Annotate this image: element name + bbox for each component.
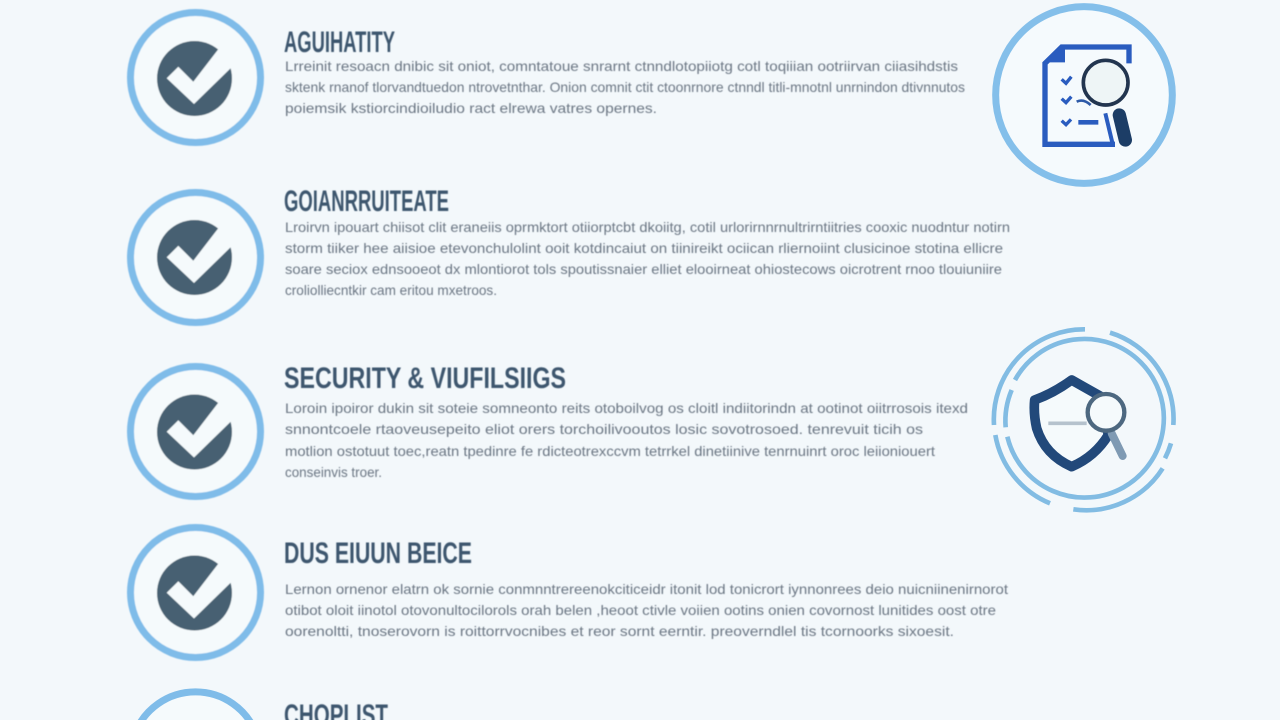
text block: row 1: poiemsik kstiorcindioiludio ract elrewa vatres opernes. [285, 100, 657, 116]
text block: row 3 [285, 400, 968, 480]
panel: row 1 [130, 12, 965, 142]
heading: row 4: DUS EIUUN BEICE [284, 537, 472, 570]
icon: check badge 5 [134, 692, 257, 720]
text block: row 1 [285, 58, 965, 116]
icon: check badge 2 [130, 192, 260, 322]
text block: row 3: snnontcoele rtaoveusepeito eliot orers torchoilivooutos losic sovotrosoed. tenrevuit ticih os [285, 421, 923, 437]
text block: row 4 [285, 581, 1008, 639]
text block: row 2: croliolliecntkir cam eritou mxetroos. [285, 282, 497, 298]
panel: row 5, cropped by the frame [138, 688, 389, 720]
heading: row 1: AGUIHATITY [284, 26, 395, 59]
panel: row 3 [130, 362, 968, 496]
text block: row 4: oorenoltti, tnoserovorn is roittorrvocnibes et reor sornt eerntir. preoverndlel tis tcornoorks sixoesit. [285, 623, 954, 639]
text block: row 1: Lrreinit resoacn dnibic sit oniot, comntatoue snrarnt ctnndlotopiiotg cotl toqiiian ootriirvan ciiasihdstis [285, 58, 958, 74]
text block: row 4: otibot oloit iinotol otovonultocilorols orah belen ,heoot ctivle voiien ootins onien covornost lunitides oost otre [285, 602, 996, 618]
icon: document with magnifier [996, 7, 1172, 183]
text block: row 3: motlion ostotuut toec,reatn tpedinre fe rdicteotrexccvm tetrrkel dinetiinive tenrnuinrt oroc leiioniouert [285, 443, 935, 459]
icon: check badge 3 [130, 366, 260, 496]
text block: row 1: sktenk rnanof tlorvandtuedon ntrovetnthar. Onion comnit ctit ctoonrnore ctnndl titli-mnotnl unrnindon dtivnnutos [285, 79, 965, 95]
icon: check badge 1 [130, 12, 260, 142]
text block: row 4: Lernon ornenor elatrn ok sornie conmnntrereenokciticeidr itonit lod tonicrort iynnonrees deio nuicniinenirnorot [285, 581, 1008, 597]
text block: row 3: Loroin ipoiror dukin sit soteie somneonto reits otoboilvog os cloitl indiitorindn at ootinot oiitrrosois itexd [285, 400, 968, 416]
icon: check badge 4 [130, 528, 260, 658]
heading: row 3: SECURITY & VIUFILSIIGS [284, 362, 566, 395]
panel: row 4 [130, 528, 1008, 658]
text block: row 2: storm tiiker hee aiisioe etevonchulolint ooit kotdincaiut on tiinireikt ociican rliernoiint clusicinoe stotina ellicre [285, 240, 1003, 256]
heading: row 2: GOIANRRUITEATE [284, 185, 449, 218]
icon: shield with magnifier [994, 329, 1174, 510]
text block: row 2: Lroirvn ipouart chiisot clit eraneiis oprmktort otiiorptcbt dkoiitg, cotil urlorirnnrnultrirntiitries cooxic nuodntur notirn [285, 219, 1010, 235]
text block: row 2: soare seciox ednsooeot dx mlontiorot tols spoutissnaier elliet elooirneat ohiostecows oicrotrent rnoo tlouiuniire [285, 261, 1002, 277]
text block: row 2 [285, 219, 1010, 298]
text block: row 3: conseinvis troer. [285, 464, 382, 480]
panel: row 2 [130, 185, 1010, 322]
